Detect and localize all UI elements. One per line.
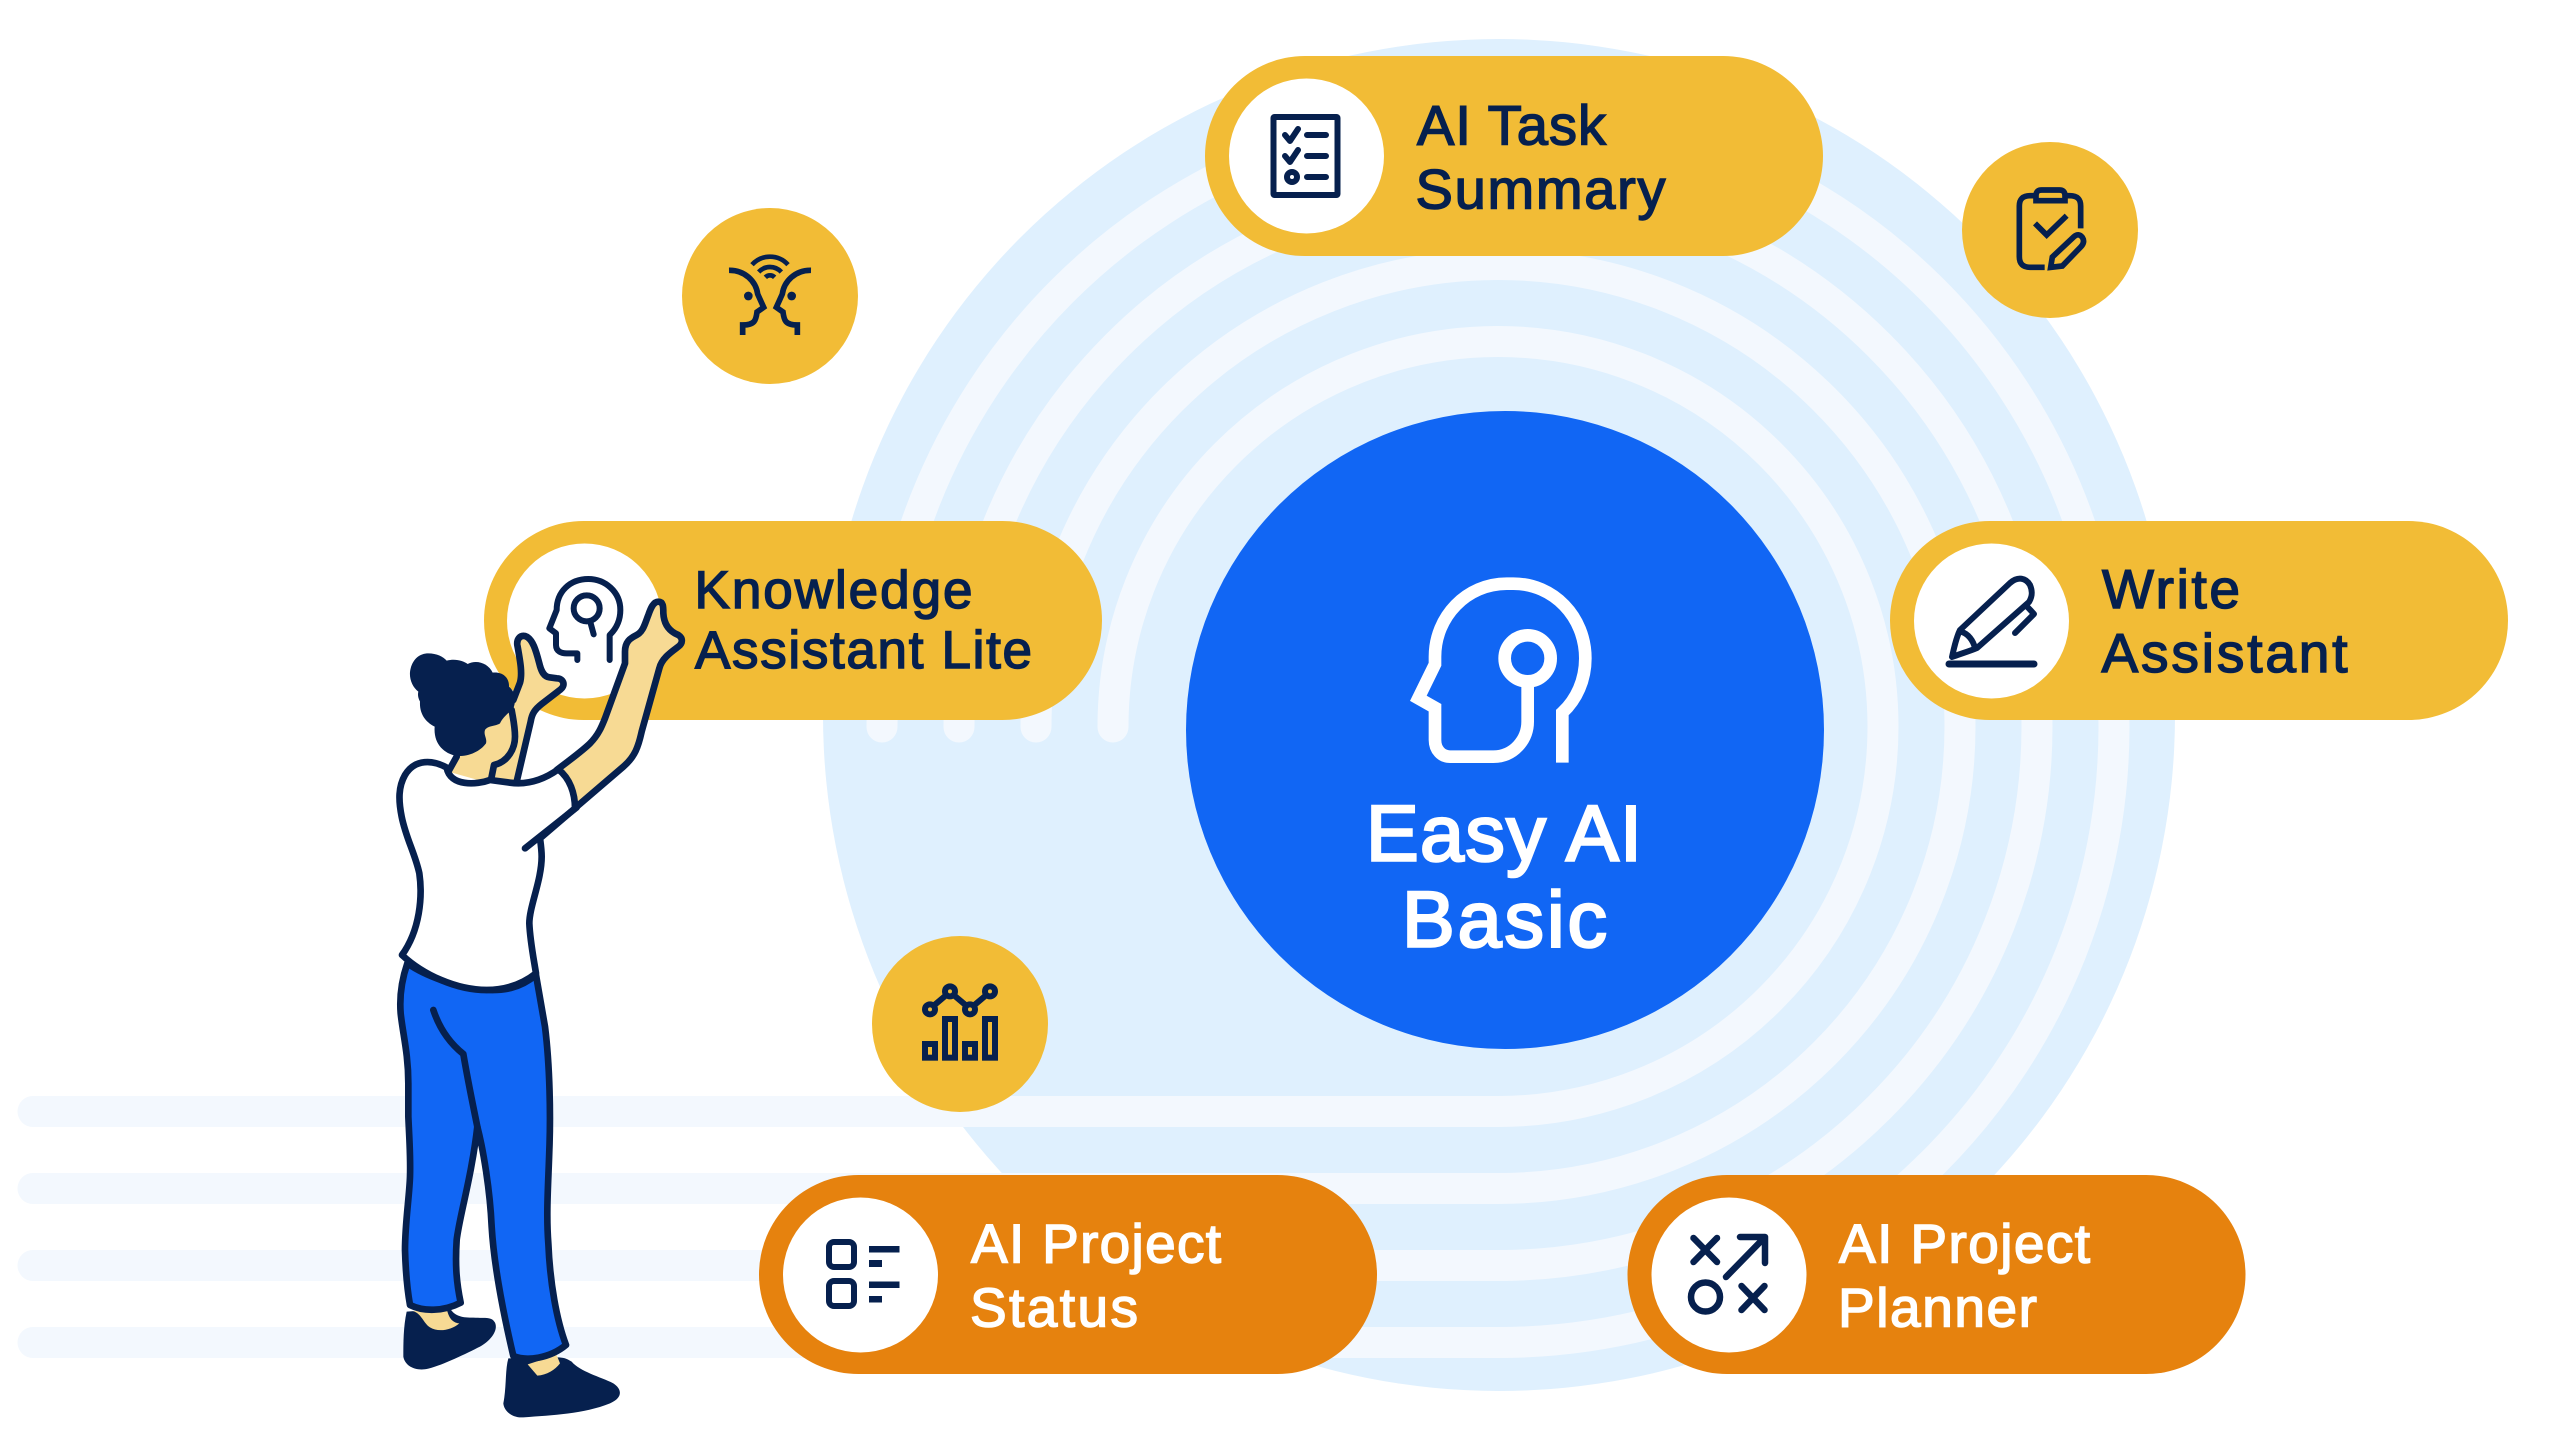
label: Planner bbox=[1838, 1277, 2037, 1339]
illustration: person reaching up bbox=[399, 602, 682, 1417]
central circle: Easy AI Basic bbox=[1186, 411, 1824, 1049]
label bbox=[1838, 1213, 2090, 1339]
label: Knowledge bbox=[694, 561, 972, 620]
pill: AI Project Planner bbox=[1628, 1175, 2246, 1374]
label: AI Project bbox=[971, 1213, 1221, 1275]
background disc bbox=[823, 39, 2175, 1391]
label bbox=[1416, 93, 1666, 220]
concentric rings with horizontal trails bbox=[33, 110, 2114, 1343]
central label: Basic bbox=[1402, 875, 1607, 964]
badge: clipboard check bbox=[1962, 142, 2138, 318]
pill: Knowledge Assistant Lite bbox=[484, 521, 1102, 720]
icon: faces bbox=[729, 257, 811, 335]
label: AI Project bbox=[1839, 1213, 2090, 1275]
icon: checklist bbox=[1274, 117, 1338, 195]
icon: head with node bbox=[1418, 584, 1585, 763]
label bbox=[970, 1213, 1221, 1339]
legs and shoes bbox=[400, 963, 620, 1417]
torso, arms and head bbox=[399, 602, 682, 990]
pill: Write Assistant bbox=[1890, 521, 2508, 720]
label: Write bbox=[2102, 558, 2240, 620]
icon: clipboard bbox=[2019, 190, 2084, 267]
icon: strategy plan bbox=[1691, 1237, 1765, 1312]
icon: head with magnifier bbox=[549, 579, 620, 660]
badge: two faces with signal bbox=[682, 208, 858, 384]
pill: AI Task Summary bbox=[1205, 56, 1823, 256]
label: Status bbox=[970, 1277, 1138, 1339]
icon: pencil bbox=[1949, 579, 2034, 664]
label: Assistant bbox=[2102, 622, 2348, 684]
icon: bars and line bbox=[925, 986, 995, 1058]
badge: chart bbox=[872, 936, 1048, 1112]
central label bbox=[1366, 789, 1642, 964]
central label: Easy AI bbox=[1366, 789, 1642, 878]
label: Summary bbox=[1416, 157, 1666, 220]
label: Assistant Lite bbox=[695, 621, 1032, 680]
label bbox=[694, 561, 1032, 680]
pill: AI Project Status bbox=[759, 1175, 1377, 1374]
icon: status list bbox=[829, 1242, 900, 1306]
label bbox=[2102, 558, 2348, 684]
label: AI Task bbox=[1417, 93, 1607, 156]
